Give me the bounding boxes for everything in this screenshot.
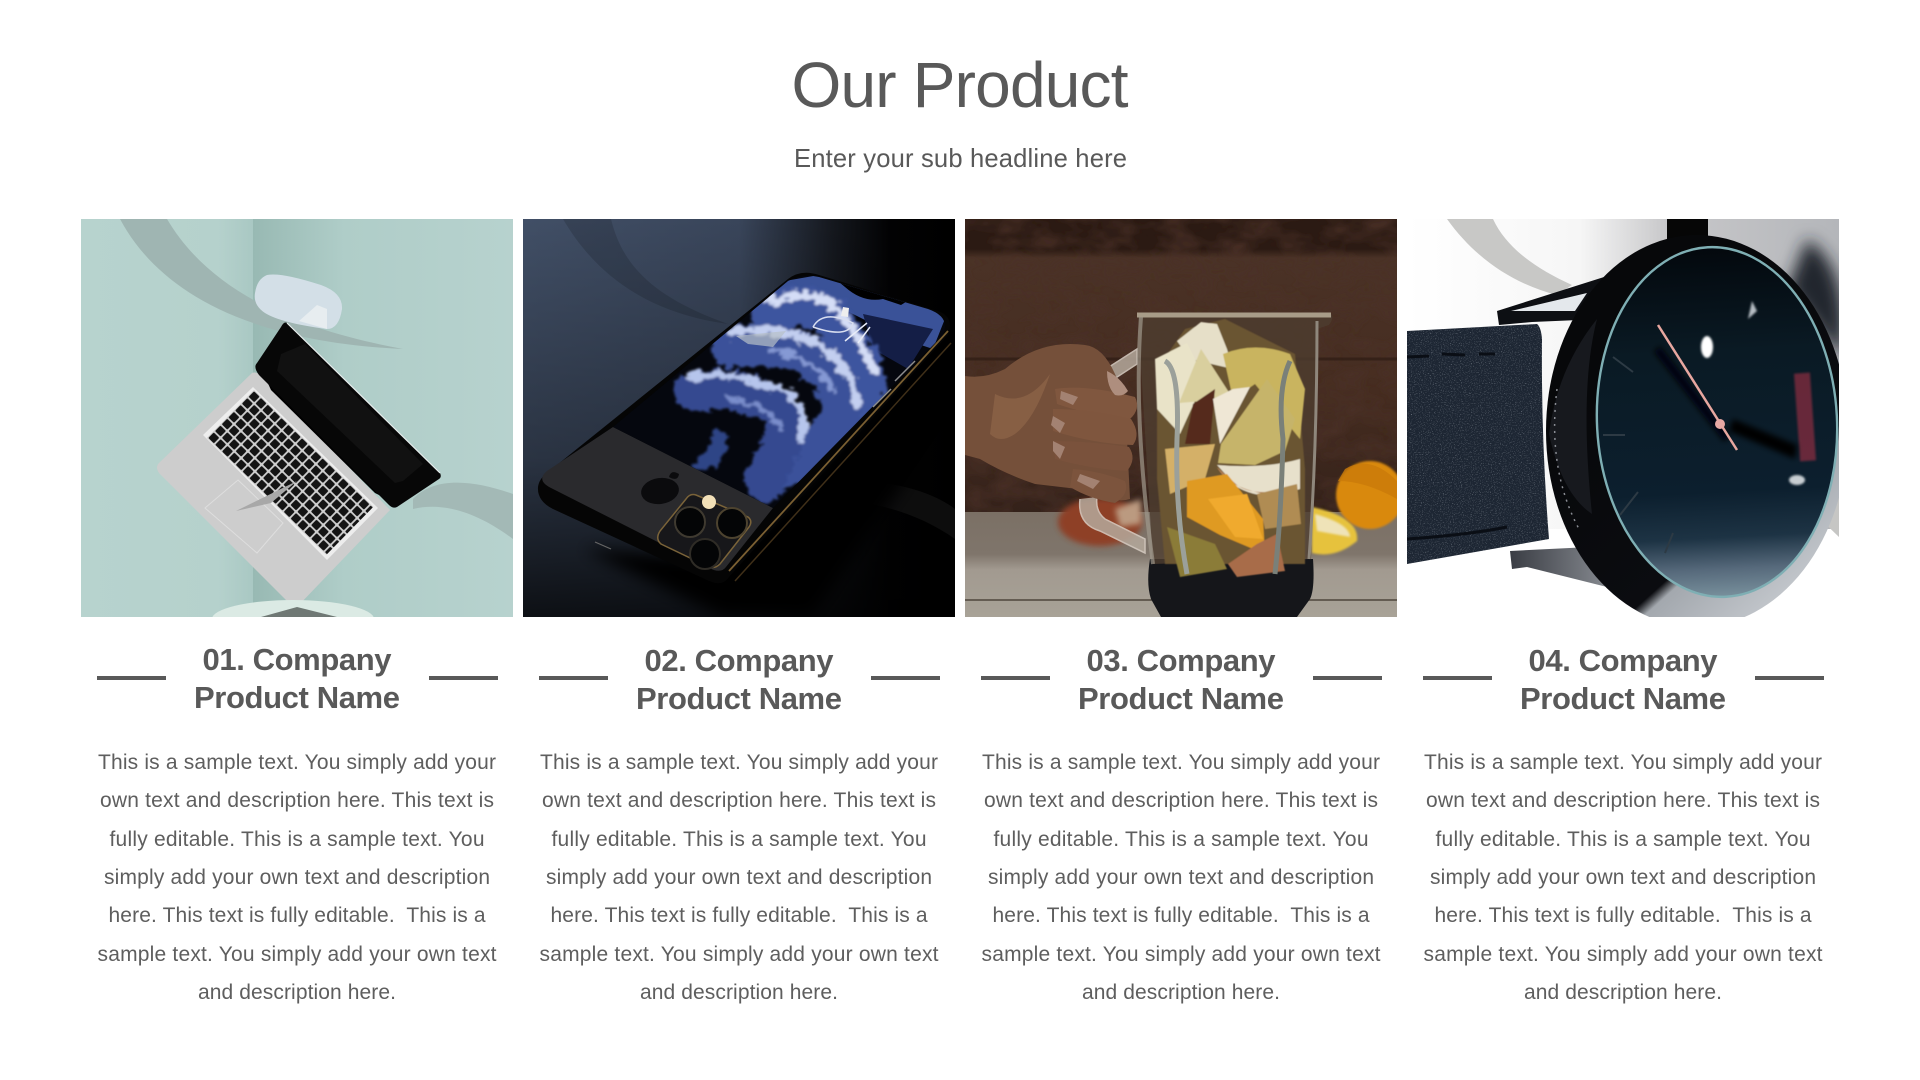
column 3: description: This is a sample text. You simply add your [982,751,1380,774]
column 3: description: fully editable. This is a sample text. You [994,828,1368,851]
pedestal [212,600,374,617]
column 4: description: here. This text is fully editable. This is a [1434,904,1812,927]
title: Our Product [792,49,1129,121]
base [1148,559,1314,617]
column 3: description: here. This text is fully editable. This is a [992,904,1370,927]
column 2: description: simply add your own text and description [546,866,932,889]
column 1: description: This is a sample text. You simply add your [98,751,496,774]
column 3: description [982,751,1381,1004]
glass jug [1080,312,1332,577]
column 1: heading: Product Name [194,680,400,715]
column 4: heading: 04. Company [1528,643,1718,678]
icon: apple logo [641,472,679,504]
column 4: description [1424,751,1823,1004]
column 1: description: simply add your own text and description [104,866,490,889]
column 2: heading: Product Name [636,681,842,716]
column 1: description: fully editable. This is a sample text. You [110,828,484,851]
fruit in jug [1155,319,1305,577]
image: smartphone [523,219,955,617]
column 3: description: and description here. [1082,981,1280,1004]
column 4: heading: Product Name [1520,681,1726,716]
column 4: description: fully editable. This is a sample text. You [1436,828,1810,851]
watch face [1588,241,1846,603]
column 1: description: sample text. You simply add your own text [98,943,497,966]
icon: phone [538,259,953,583]
column 2: heading: 02. Company [644,643,834,678]
column 3: description: sample text. You simply add your own text [982,943,1381,966]
icon: mouse [255,274,342,329]
column 3: description: simply add your own text and description [988,866,1374,889]
column 1: heading [97,642,498,715]
lower lug [1510,548,1606,587]
strap [1407,324,1549,564]
column 2: heading [539,643,940,716]
column 3: heading [981,643,1382,716]
column 1: description [98,751,497,1004]
column 4: description: sample text. You simply add your own text [1424,943,1823,966]
column 4: heading [1423,643,1824,716]
camera module [658,494,751,569]
column 4: description: simply add your own text and description [1430,866,1816,889]
handle [1080,349,1145,553]
image: blender with fruit [965,219,1404,617]
column 3: heading: Product Name [1078,681,1284,716]
column 2: description: here. This text is fully editable. This is a [550,904,928,927]
hand [965,344,1137,503]
column 2: description [540,751,939,1004]
column 2: description: This is a sample text. You simply add your [540,751,938,774]
phone shadow [594,425,900,617]
column 2: description: fully editable. This is a sample text. You [552,828,926,851]
column 2: description: sample text. You simply add your own text [540,943,939,966]
screen clouds [688,295,873,481]
column 1: heading: 01. Company [202,642,392,677]
column 2: description: own text and description here. This text is [542,789,936,812]
subtitle: Enter your sub headline here [794,145,1127,173]
column 3: description: own text and description here. This text is [984,789,1378,812]
watch case [1546,235,1848,627]
column 1: description: own text and description here. This text is [100,789,494,812]
column 4: description: and description here. [1524,981,1722,1004]
icon: laptop [157,322,441,607]
column 3: heading: 03. Company [1086,643,1276,678]
column 1: description: and description here. [198,981,396,1004]
column 1: description: here. This text is fully editable. This is a [108,904,486,927]
image: wristwatch [1407,219,1848,627]
upper lug [1497,277,1604,325]
column 2: description: and description here. [640,981,838,1004]
column 4: description: own text and description here. This text is [1426,789,1820,812]
image: laptop on mint wall [81,219,513,638]
background fruit [1058,461,1404,554]
column 4: description: This is a sample text. You simply add your [1424,751,1822,774]
